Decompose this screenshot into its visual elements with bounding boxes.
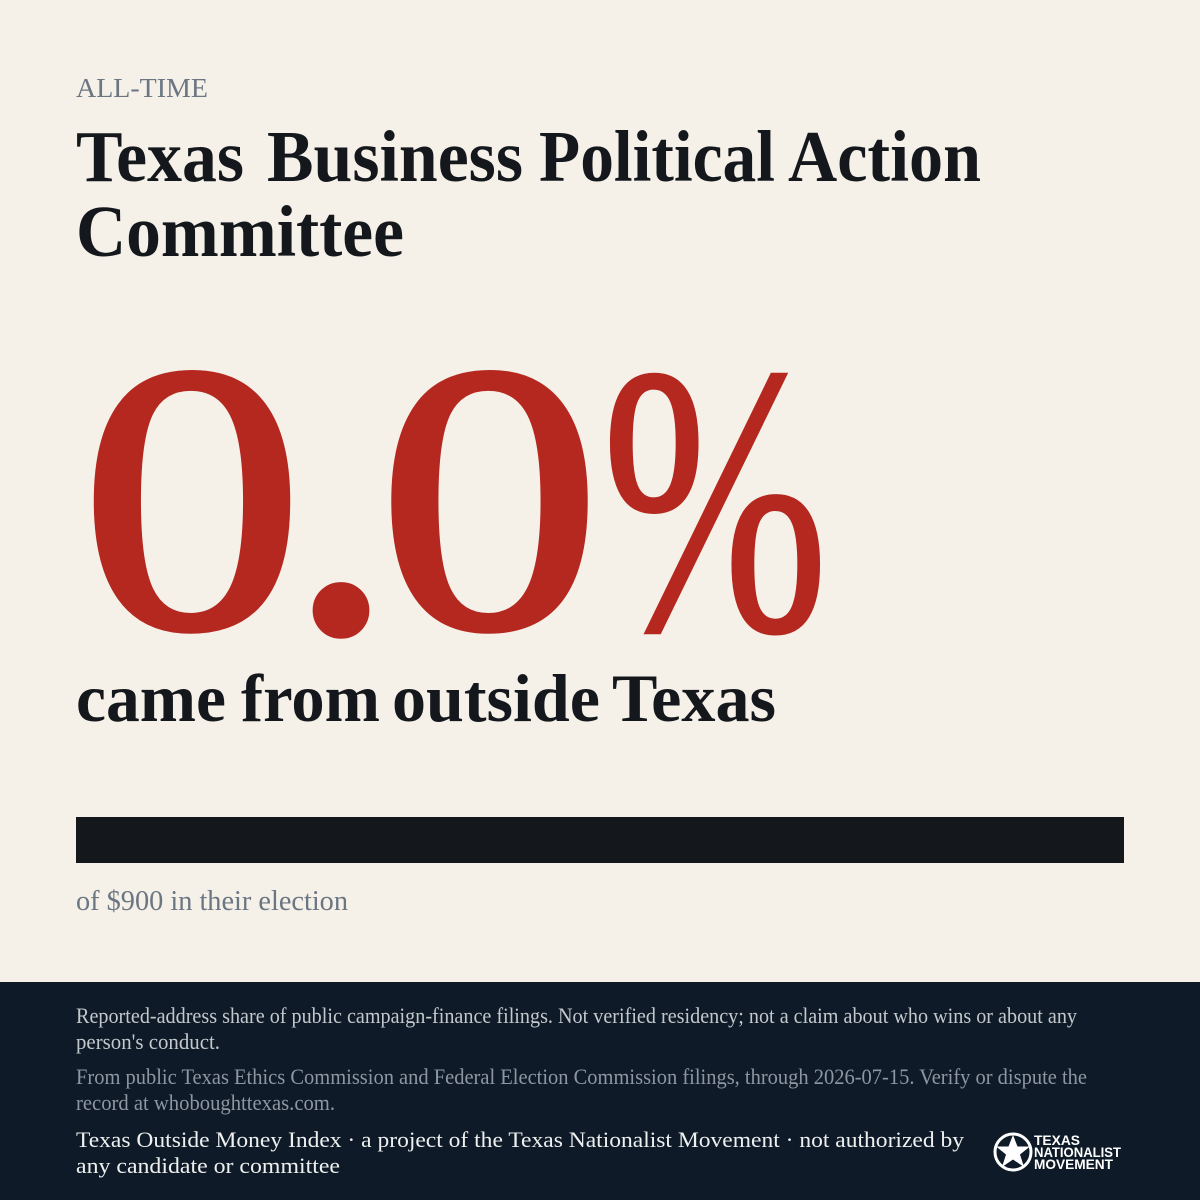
disclaimer text: person's conduct.	[76, 1029, 220, 1054]
logo wordmark	[1034, 1133, 1122, 1172]
title	[76, 116, 981, 272]
logo wordmark: TEXAS	[1034, 1133, 1080, 1148]
big statistic: 0.0%: .	[281, 204, 401, 736]
big statistic: 0.0%: 0	[80, 287, 304, 710]
title: Committee	[76, 191, 404, 272]
attribution text: any candidate or committee	[76, 1153, 340, 1178]
icon: star in circle	[995, 1134, 1031, 1170]
big statistic: 0.0%	[80, 204, 828, 736]
statistic caption: from	[241, 660, 380, 736]
attribution text	[76, 1127, 964, 1178]
title: Action	[788, 116, 981, 197]
logo: Texas Nationalist Movement	[995, 1133, 1122, 1172]
eyebrow: time period: ALL-TIME	[76, 73, 208, 103]
logo wordmark: NATIONALIST	[1034, 1145, 1122, 1160]
disclaimer text	[76, 1003, 1077, 1054]
footer panel	[0, 982, 1200, 1200]
statistic caption: came	[76, 660, 226, 736]
logo wordmark: MOVEMENT	[1034, 1157, 1114, 1172]
statistic caption	[76, 660, 776, 736]
bar caption: of $900 in their election	[76, 885, 348, 917]
title: Business	[267, 116, 523, 197]
statistic caption: Texas	[612, 660, 776, 736]
big statistic: 0.0%: 0	[378, 287, 601, 710]
statistic caption: outside	[392, 660, 600, 736]
source text	[76, 1064, 1087, 1115]
title: Texas	[76, 116, 244, 197]
source text: From public Texas Ethics Commission and Federal Election Commission filings, through 2026-07-15. Verify or dispute the	[76, 1064, 1087, 1089]
progress bar	[76, 817, 1124, 863]
attribution text: Texas Outside Money Index · a project of the Texas Nationalist Movement · not authorized by	[76, 1127, 964, 1152]
disclaimer text: Reported-address share of public campaign-finance filings. Not verified residency; not a claim about who wins or about any	[76, 1003, 1077, 1028]
source text: record at whoboughttexas.com.	[76, 1090, 335, 1115]
big statistic: 0.0%: %	[602, 288, 828, 712]
title: Political	[539, 116, 775, 197]
